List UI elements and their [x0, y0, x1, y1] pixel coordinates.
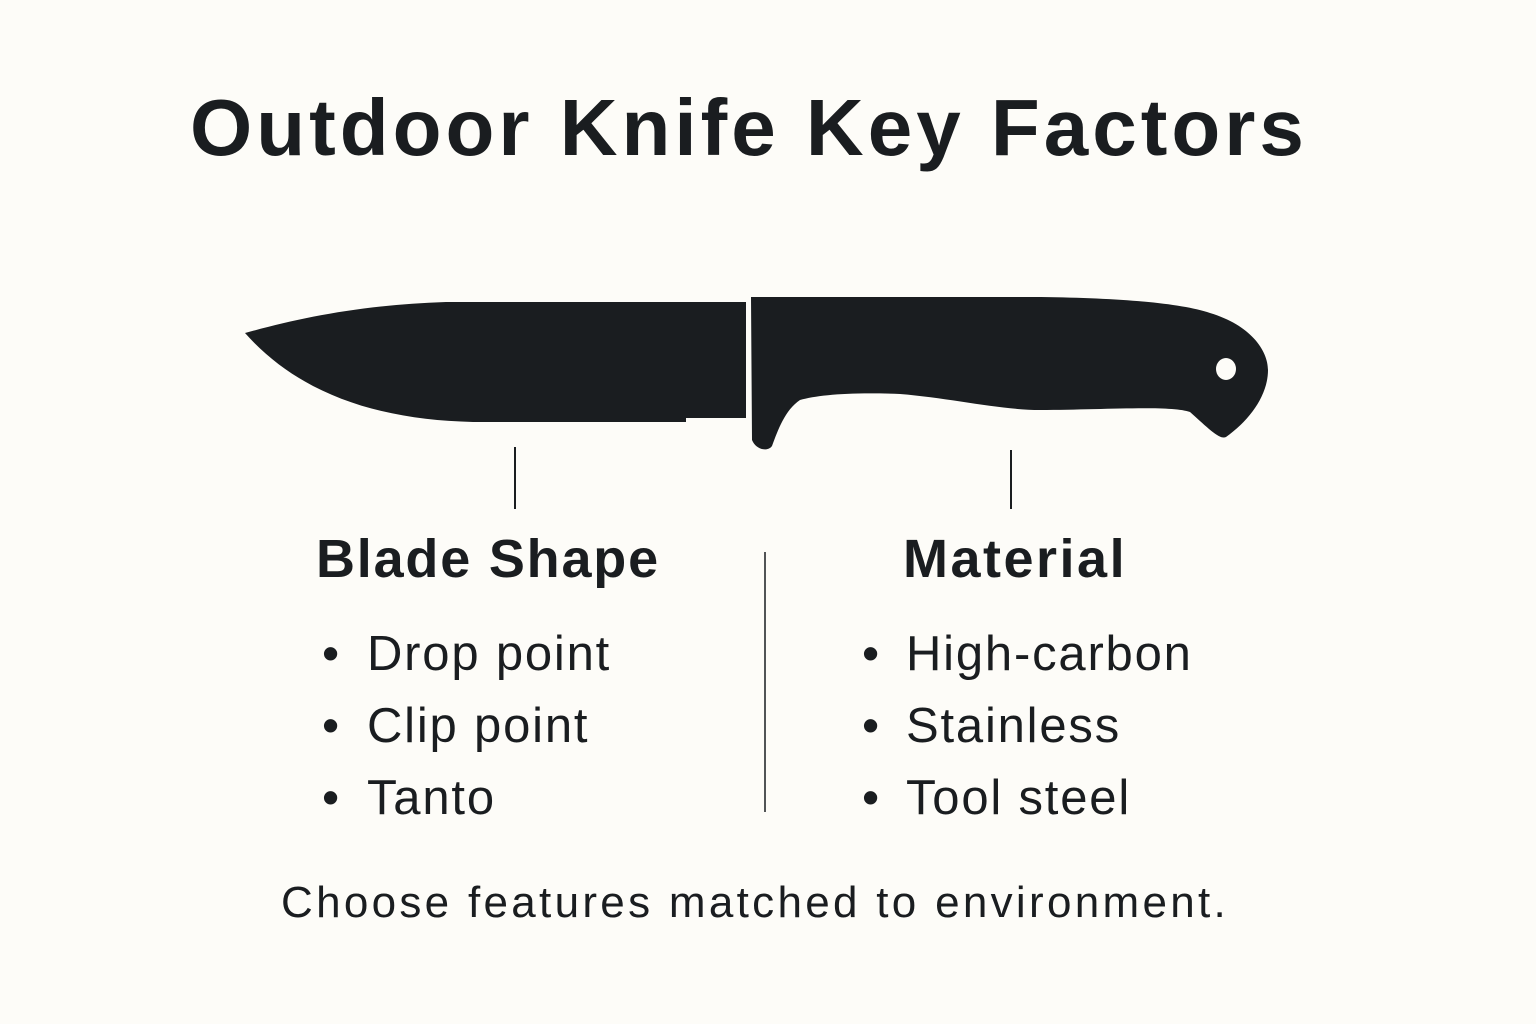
- list: materials: [862, 627, 1193, 825]
- list: blade shapes: •: [322, 627, 341, 681]
- list: blade shapes: •: [322, 699, 341, 753]
- footer note: Choose features matched to environment.: [281, 878, 1229, 927]
- list: materials: Tool steel: [906, 771, 1131, 825]
- heading: blade shape: Blade Shape: [316, 529, 660, 589]
- handle: [751, 297, 1268, 449]
- list: materials: Stainless: [906, 699, 1121, 753]
- list: blade shapes: Tanto: [367, 771, 496, 825]
- heading: material: Material: [903, 529, 1127, 589]
- list: materials: •: [862, 627, 881, 681]
- blade: [245, 302, 746, 422]
- list: materials: High-carbon: [906, 627, 1193, 681]
- icon: lanyard hole: [1216, 358, 1236, 380]
- list: blade shapes: [322, 627, 611, 825]
- panel: material: [862, 529, 1193, 825]
- panel: blade shape: [316, 529, 660, 825]
- pointer lines: [514, 447, 516, 509]
- list: materials: •: [862, 771, 881, 825]
- title: Outdoor Knife Key Factors: [190, 83, 1308, 172]
- list: materials: •: [862, 699, 881, 753]
- list: blade shapes: Clip point: [367, 699, 589, 753]
- list: blade shapes: •: [322, 771, 341, 825]
- list: blade shapes: Drop point: [367, 627, 611, 681]
